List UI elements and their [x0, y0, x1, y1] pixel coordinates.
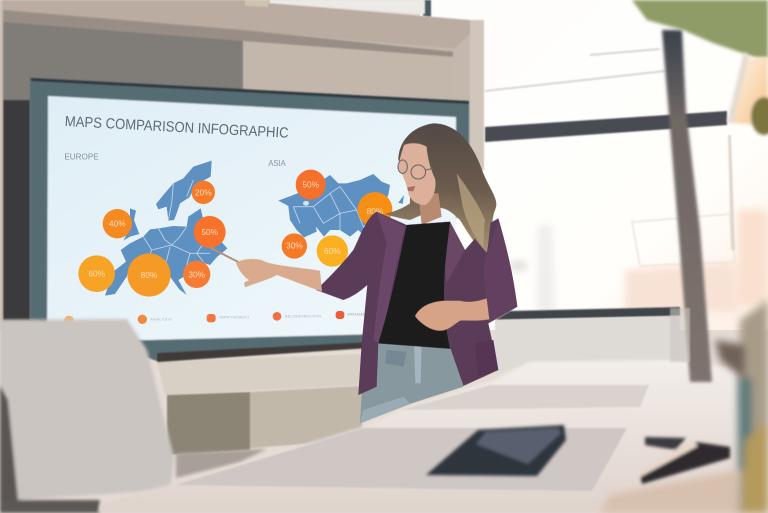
hair front: [425, 129, 495, 253]
keyboard: [426, 425, 566, 476]
display: [30, 78, 469, 362]
wall panels and soffit: [0, 0, 484, 330]
bubble Asia 30%: 30%: [286, 241, 303, 251]
lamp: [727, 52, 768, 135]
bubble 50%: [194, 216, 226, 248]
bubble 30%: [183, 261, 210, 288]
label: Europe: EUROPE: [64, 151, 99, 161]
presenter: [236, 123, 517, 423]
bubble 80%: 80%: [141, 270, 158, 280]
blazer: [316, 212, 517, 395]
bubble 60%: 60%: [88, 269, 106, 279]
hair back: [385, 123, 496, 253]
desk mat front: [176, 428, 627, 491]
bubbles: Asia: [282, 170, 392, 267]
face: [398, 143, 436, 205]
map: Europe: [105, 161, 227, 296]
foreground plant stem: [715, 300, 768, 513]
label: Asia: ASIA: [268, 158, 286, 168]
bubble Asia 60%: 60%: [324, 246, 341, 256]
pointer stick: [210, 248, 238, 262]
bubble 40%: 40%: [109, 218, 126, 228]
wall below window: [495, 316, 680, 374]
bubble 60%: [78, 255, 115, 292]
bubble 50%: 50%: [201, 227, 219, 237]
plant leaf top right: [632, 0, 768, 58]
black top: [378, 222, 450, 349]
right forearm and hand: [415, 298, 489, 331]
display bezel: [30, 78, 469, 362]
jeans: [360, 342, 463, 423]
blurred foreground post: [662, 30, 712, 382]
panels beneath display: [157, 354, 362, 455]
legend: IMPROVEMENT: [219, 316, 250, 320]
bubble 80%: [127, 253, 171, 297]
wall corner near post: [670, 308, 690, 362]
bubbles: Europe: [78, 181, 226, 297]
neck: [418, 193, 442, 225]
bubble 20%: [192, 181, 215, 204]
map: Asia borders: [293, 187, 363, 230]
bubble 40%: [103, 209, 132, 238]
window frame bars: [423, 0, 735, 320]
chair: [0, 319, 267, 513]
bubble 20%: 20%: [195, 187, 212, 197]
pointing arm and hand: [236, 259, 322, 292]
legend: [64, 311, 367, 326]
bubble 30%: 30%: [188, 269, 206, 279]
title: MAPS COMPARISON INFOGRAPHIC: [64, 114, 289, 142]
phone: [640, 437, 730, 484]
bubble Asia 80%: 80%: [367, 206, 384, 216]
desk: [98, 360, 740, 513]
map: Europe borders: [143, 180, 210, 277]
infographic on screen: [64, 114, 404, 326]
legend: RECONSTRUCTION: [285, 314, 321, 318]
screen surface: [47, 96, 456, 342]
legend: ANALYSIS: [150, 318, 172, 322]
glasses: [398, 160, 433, 179]
bubble Asia 50%: 50%: [302, 180, 320, 190]
window background: [420, 0, 768, 330]
desk mat rear: [402, 385, 649, 410]
map: Asia: [278, 174, 404, 237]
legend: IMPROVEMENT: [347, 313, 367, 317]
